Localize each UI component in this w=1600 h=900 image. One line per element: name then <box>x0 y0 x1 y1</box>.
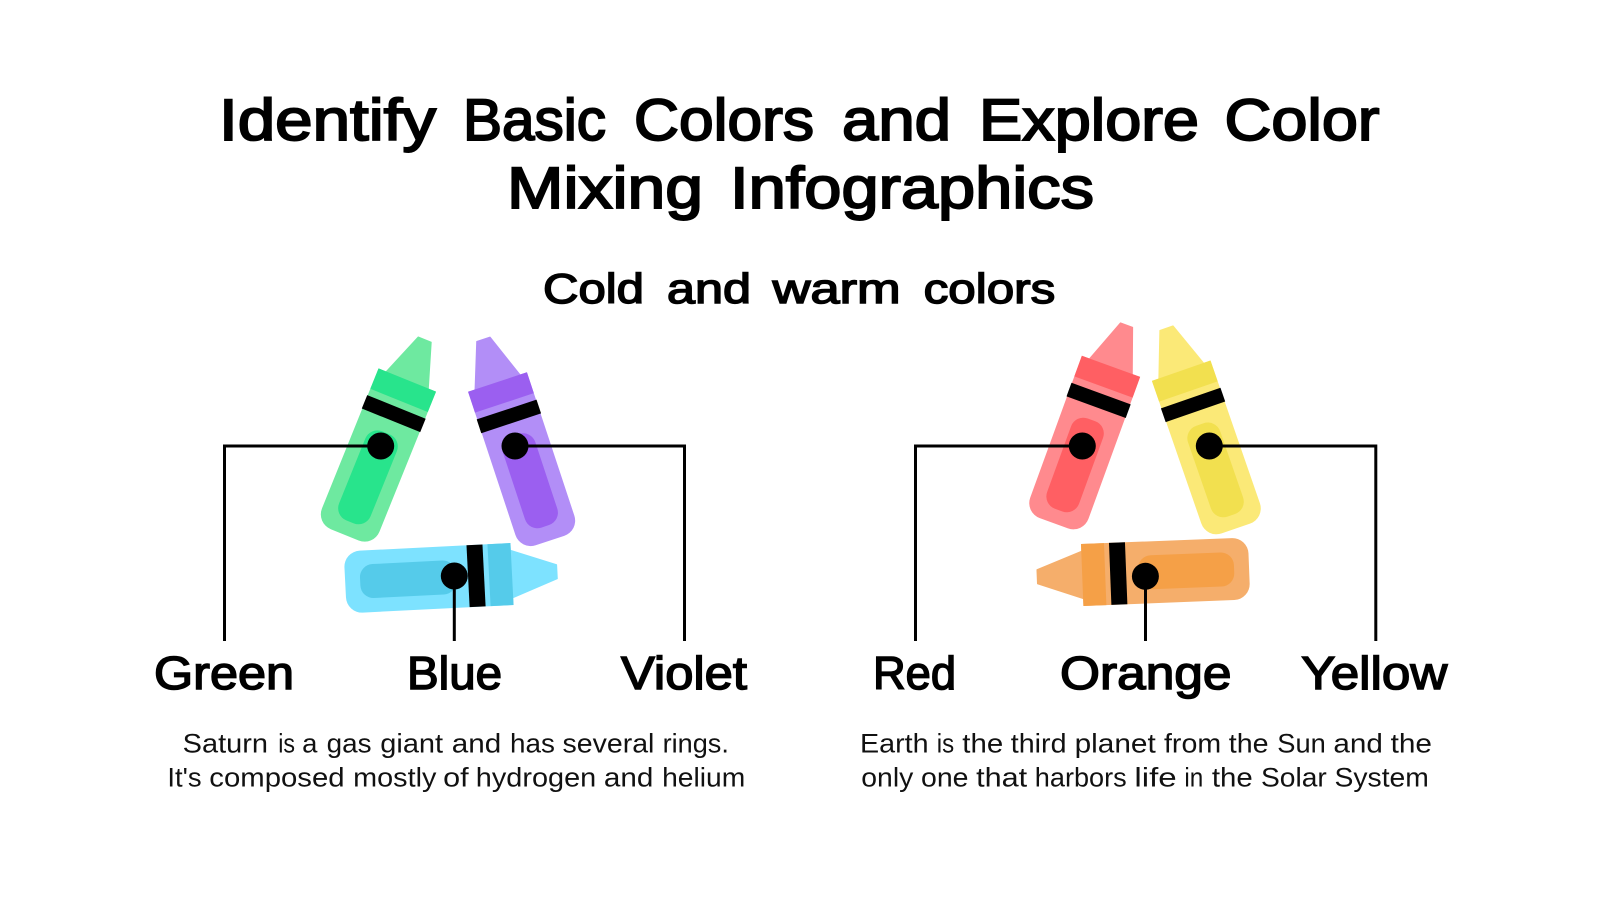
text block: Earth description: planet <box>1075 728 1156 758</box>
text block: Earth description: third <box>1011 728 1066 758</box>
title: Identify <box>219 88 436 153</box>
text block: Saturn description: giant <box>380 728 444 758</box>
title: and <box>842 88 951 153</box>
text block: Earth description: Sun <box>1277 728 1326 758</box>
text block: Saturn description: mostly <box>353 763 437 793</box>
text block: Earth description <box>860 728 1432 793</box>
text block: Saturn description <box>167 728 745 793</box>
text block: Earth description: the <box>962 728 1003 758</box>
title: Explore <box>979 88 1199 153</box>
title: Basic <box>463 88 606 153</box>
title: Infographics <box>730 156 1094 221</box>
label: Violet: Violet <box>621 647 747 699</box>
text block: Earth description: the <box>1212 763 1253 793</box>
text block: Saturn description: composed <box>209 763 345 793</box>
connector: red <box>916 432 1096 641</box>
connector: yellow <box>1196 432 1376 641</box>
crayon: red <box>1024 314 1156 534</box>
title: Colors <box>634 88 814 153</box>
title: Mixing <box>507 156 703 221</box>
text block: Earth description: from <box>1164 728 1221 758</box>
subtitle: colors <box>924 265 1055 312</box>
text block: Saturn description: Saturn <box>183 728 268 758</box>
text block: Earth description: in <box>1184 763 1203 793</box>
text block: Earth description: harbors <box>1035 763 1127 793</box>
text block: Saturn description: of <box>443 763 469 793</box>
crayon: green <box>316 327 453 547</box>
text block: Saturn description: a <box>302 728 318 758</box>
text block: Earth description: the <box>1391 728 1432 758</box>
text block: Earth description: life <box>1134 763 1177 793</box>
title <box>219 88 1380 221</box>
label: Yellow: Yellow <box>1301 647 1448 699</box>
text block: Saturn description: hydrogen <box>476 763 596 793</box>
crayon: yellow <box>1137 318 1266 539</box>
panel: cold colors <box>154 327 747 793</box>
subtitle: and <box>667 265 751 312</box>
text block: Earth description: is <box>937 728 954 758</box>
text block: Saturn description: has <box>510 728 555 758</box>
text block: Saturn description: It's <box>167 763 202 793</box>
text block: Saturn description: helium <box>662 763 745 793</box>
crayon: orange <box>1036 537 1250 608</box>
crayon: blue <box>344 541 559 613</box>
text block: Earth description: the <box>1229 728 1269 758</box>
subtitle: warm <box>771 265 901 312</box>
title: Color <box>1224 88 1380 153</box>
connector: blue <box>441 562 468 641</box>
text block: Saturn description: gas <box>327 728 372 758</box>
panel: warm colors <box>860 314 1448 793</box>
text block: Saturn description: is <box>278 728 295 758</box>
text block: Earth description: Earth <box>860 728 929 758</box>
text block: Earth description: that <box>976 763 1028 793</box>
connector: green <box>224 432 394 641</box>
text block: Earth description: Solar <box>1261 763 1327 793</box>
label: Orange: Orange <box>1060 647 1232 699</box>
text block: Saturn description: and <box>604 763 653 793</box>
label: Blue: Blue <box>407 647 502 699</box>
connector: orange <box>1132 563 1159 641</box>
text block: Earth description: System <box>1334 763 1429 793</box>
text block: Saturn description: and <box>452 728 501 758</box>
label: Red: Red <box>873 647 956 699</box>
text block: Saturn description: rings. <box>663 728 729 758</box>
text block: Saturn description: several <box>562 728 654 758</box>
text block: Earth description: only <box>861 763 914 793</box>
subtitle <box>543 265 1055 312</box>
connector: violet <box>502 432 684 641</box>
text block: Earth description: and <box>1333 728 1383 758</box>
crayon: violet <box>453 329 580 550</box>
label: Green: Green <box>154 647 294 699</box>
subtitle: Cold <box>543 265 644 312</box>
text block: Earth description: one <box>921 763 968 793</box>
